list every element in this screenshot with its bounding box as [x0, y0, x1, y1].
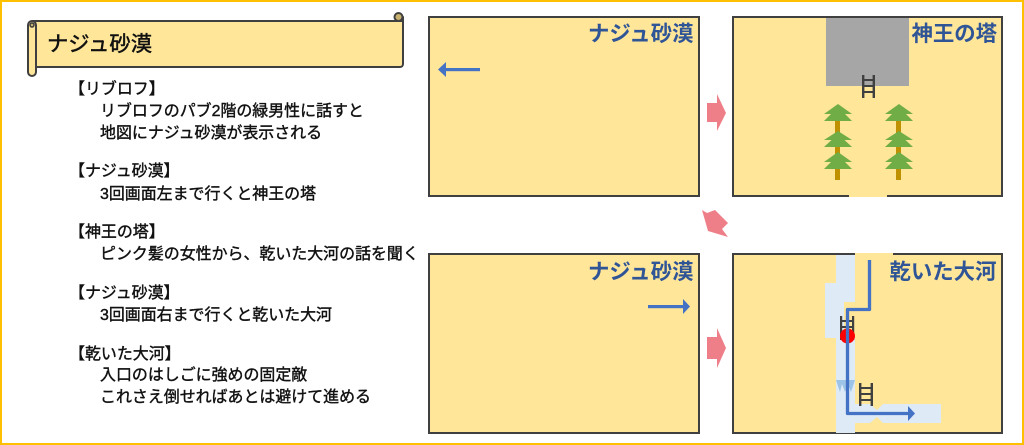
- icon: ladder: [859, 383, 873, 406]
- panel: God king tower: [733, 17, 1002, 197]
- step list: 地図にナジュ砂漠が表示される: [100, 124, 322, 142]
- step list: 【神王の塔】: [69, 223, 165, 241]
- icon: ladder: [840, 316, 854, 340]
- panel: Naju desert, go right: [429, 254, 699, 433]
- arrow: panel 3 to 4: [707, 328, 726, 368]
- tower: [826, 18, 909, 86]
- step list: 3回画面右まで行くと乾いた大河: [100, 306, 332, 324]
- panel: Naju desert, go left: [429, 17, 699, 196]
- step list: 入口のはしごに強めの固定敵: [100, 366, 307, 384]
- arrow: panel 2 to 3: [702, 210, 728, 237]
- enemy marker: [840, 328, 855, 344]
- arrow: right: [648, 299, 690, 314]
- title scroll banner: [28, 13, 403, 76]
- arrow: left: [438, 62, 480, 77]
- entrance gap: [855, 253, 893, 255]
- step list: ピンク髪の女性から、乾いた大河の話を聞く: [100, 245, 419, 263]
- step list: これさえ倒せればあとは避けて進める: [100, 388, 371, 406]
- icon: ladder: [862, 75, 875, 98]
- step list: 【ナジュ砂漠】: [69, 162, 179, 180]
- arrow: panel 1 to 2: [707, 94, 726, 131]
- tree column: right: [885, 104, 913, 180]
- route arrow: [848, 260, 915, 421]
- tree column: left: [824, 104, 852, 180]
- panel title: ナジュ砂漠: [588, 22, 693, 46]
- panel: Dry river: [733, 253, 1002, 433]
- title text: ナジュ砂漠: [47, 32, 152, 56]
- step list: 【乾いた大河】: [69, 345, 181, 363]
- step list: リブロフのパブ2階の緑男性に話すと: [100, 101, 364, 120]
- step list: 【ナジュ砂漠】: [69, 284, 179, 302]
- entrance gap: [849, 195, 887, 197]
- step list: 【リブロフ】: [69, 79, 165, 98]
- trees: [824, 104, 913, 180]
- step list: 3回画面左まで行くと神王の塔: [100, 185, 316, 203]
- panel title: ナジュ砂漠: [588, 260, 693, 284]
- dry river bed: [825, 255, 941, 433]
- panel title: 神王の塔: [912, 22, 998, 46]
- icon: waterfall: [836, 380, 855, 392]
- step list: [69, 79, 419, 406]
- panel title: 乾いた大河: [890, 260, 996, 284]
